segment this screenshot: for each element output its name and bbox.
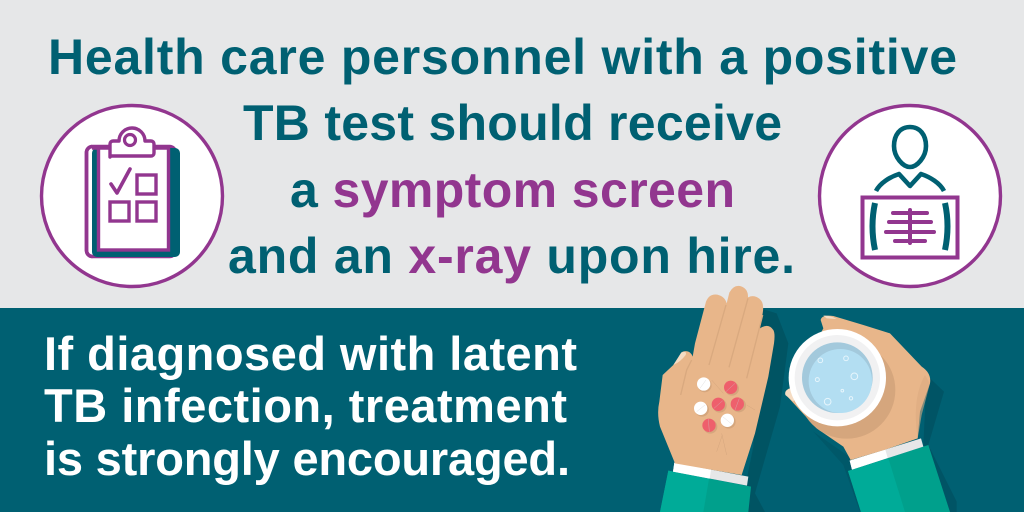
illustration: hand holding glass of water [785,316,957,512]
sleeve [848,445,950,512]
cuff [673,463,748,486]
knuckle shading [916,375,930,438]
title: and an x-ray upon hire. [228,228,795,284]
icon: person with chest x-ray [820,106,1000,286]
bubbles [815,356,858,405]
shadow of glass [798,341,895,439]
bottom message [44,327,577,485]
pills [698,378,712,392]
fingernails [823,316,837,319]
title: Health care personnel with a positive [48,29,957,85]
sleeve [660,471,751,512]
title: a symptom screen [290,162,735,218]
illustration: hand holding pills [658,286,788,512]
water [809,349,872,413]
palm and fingers [658,286,775,475]
thumb nail [673,352,686,365]
bottom message: If diagnosed with latent [44,327,577,380]
title [48,29,957,284]
finger creases [681,298,763,395]
hand [786,316,930,460]
icon: clipboard checklist [42,106,222,286]
title: TB test should receive [243,95,782,151]
bottom message: TB infection, treatment [44,379,567,432]
cuff [850,438,923,470]
glass rim [789,329,886,426]
bottom message: is strongly encouraged. [44,432,570,485]
